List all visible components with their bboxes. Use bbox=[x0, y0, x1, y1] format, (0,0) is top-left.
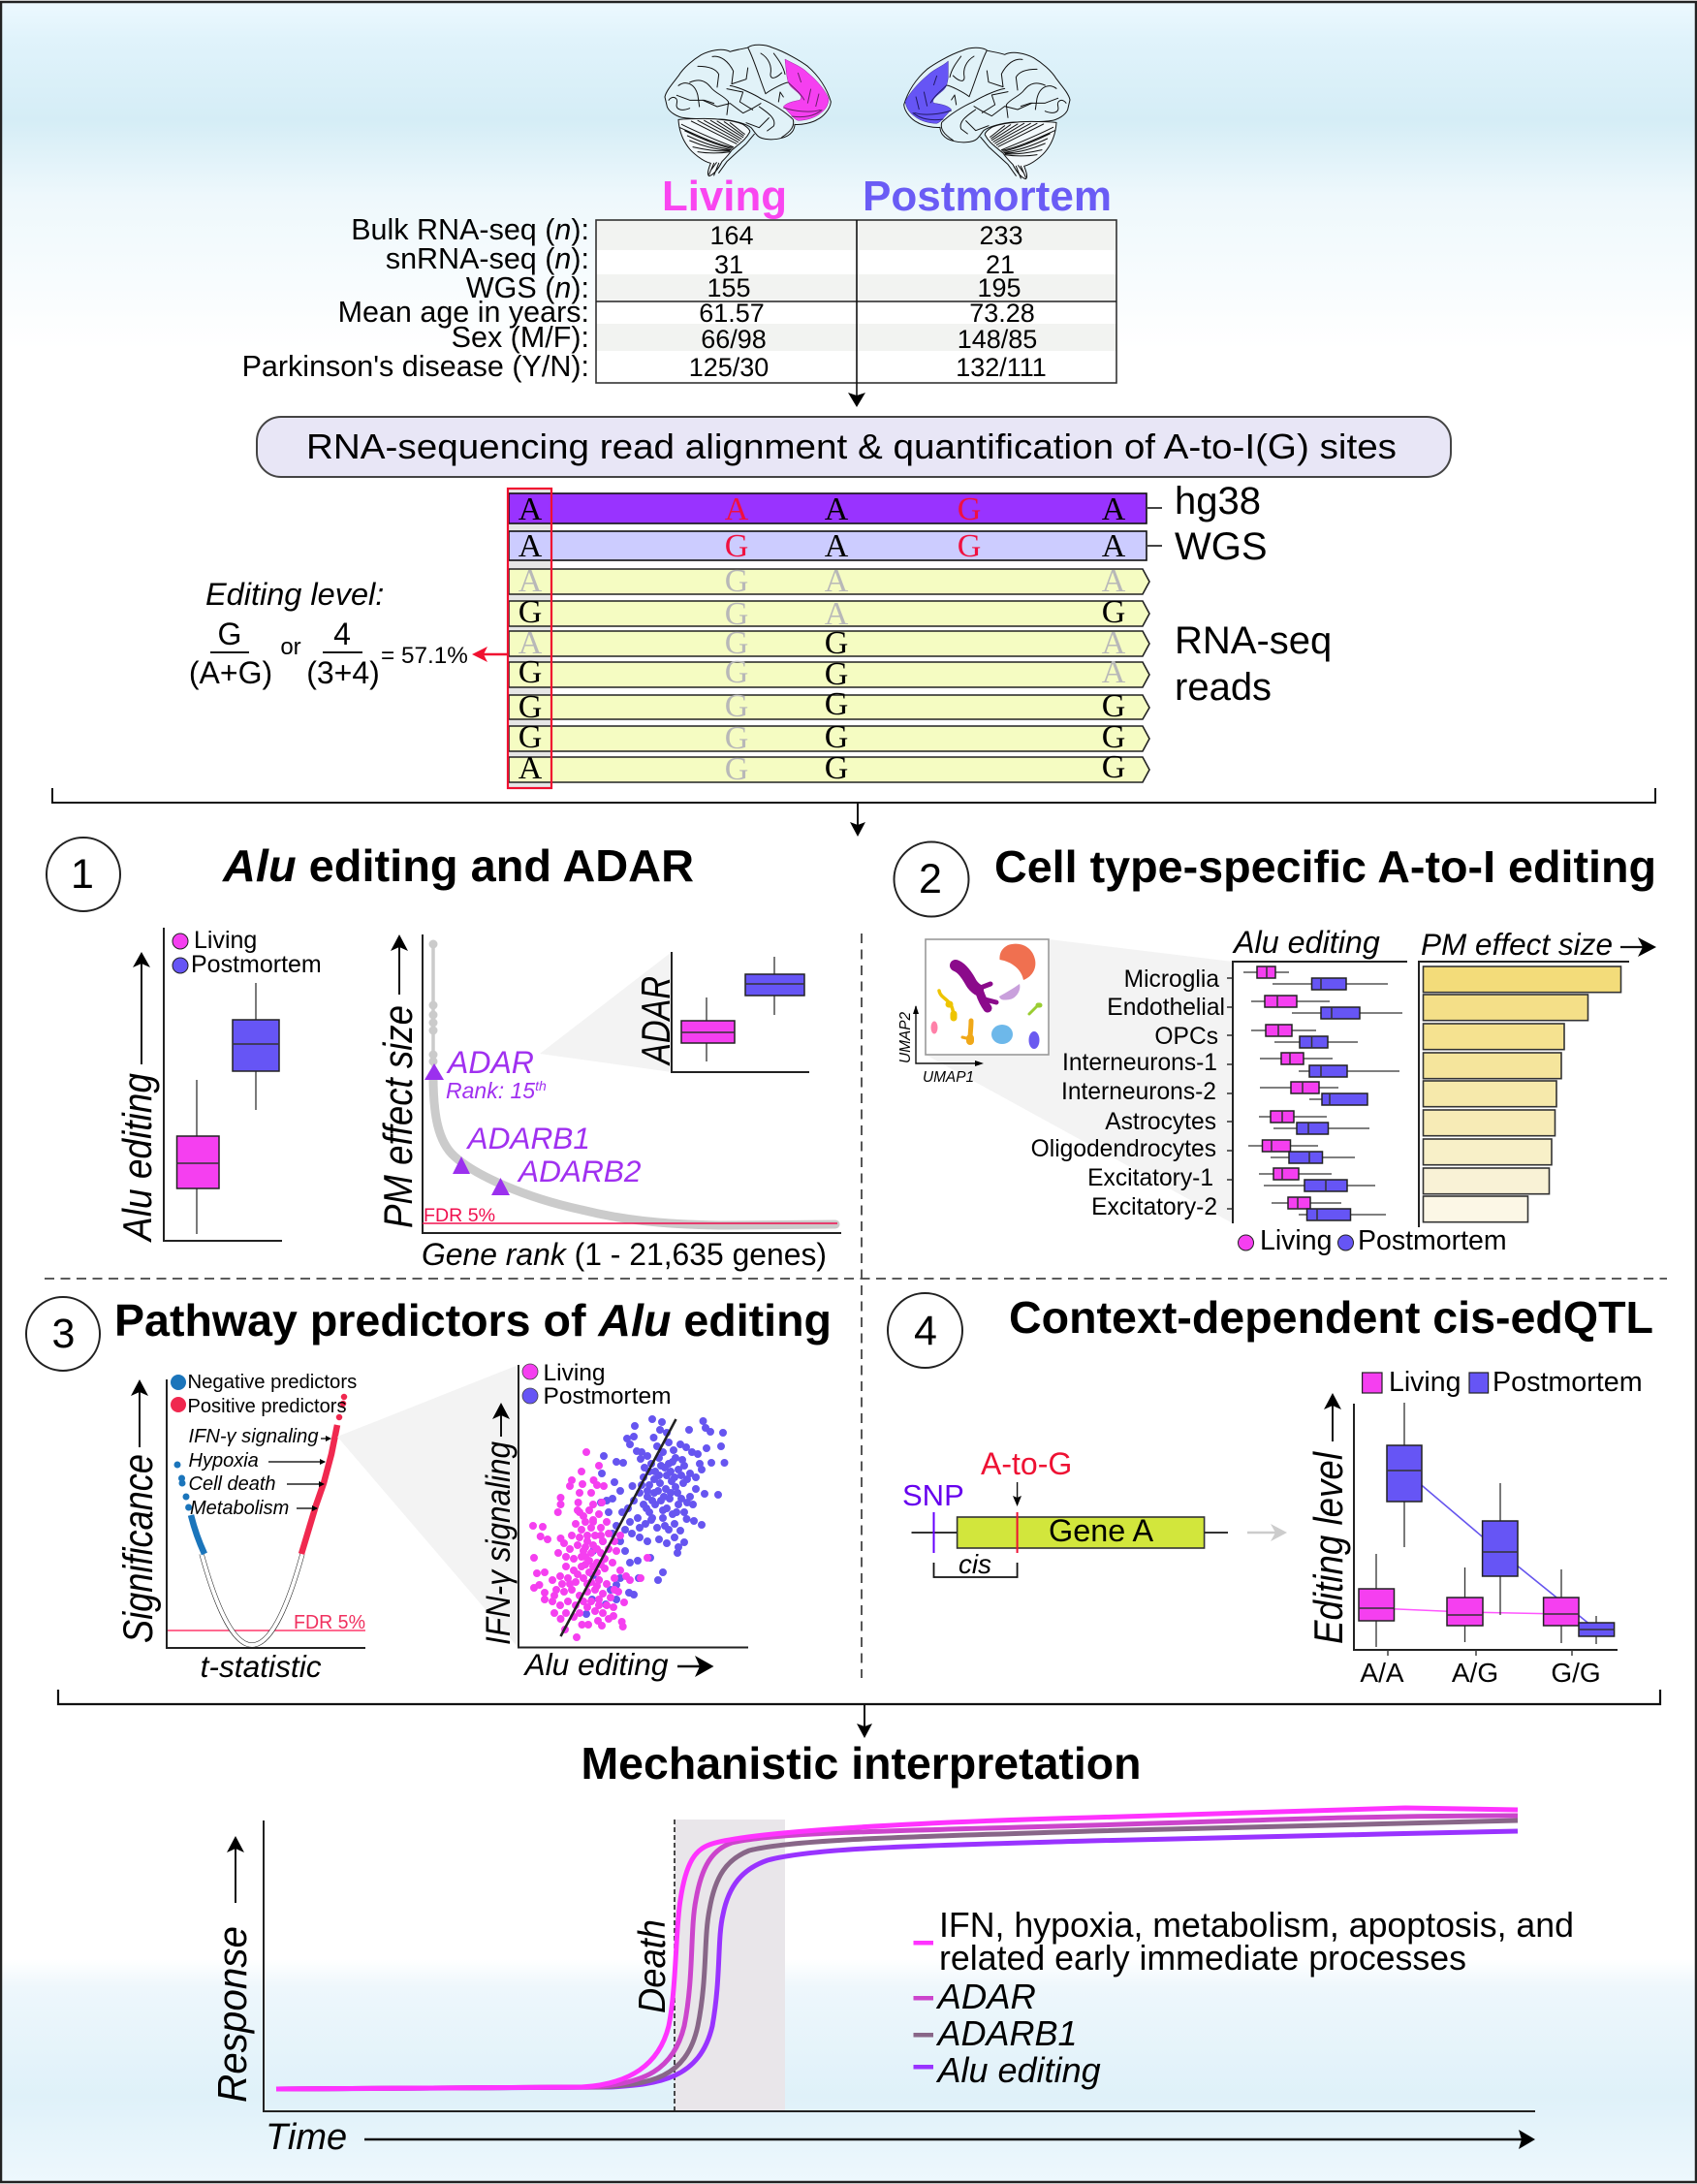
legend: Negative predictors bbox=[188, 1372, 357, 1393]
base letters bbox=[519, 491, 1126, 787]
table: cohort sample sizes: 61.57 bbox=[699, 299, 765, 328]
base letters: G bbox=[1102, 749, 1125, 785]
base letters: G bbox=[825, 750, 848, 786]
gene diagram: cis bbox=[958, 1549, 991, 1579]
base letters: A bbox=[825, 491, 849, 527]
FDR threshold: FDR 5% bbox=[424, 1205, 495, 1226]
base letters: G bbox=[725, 720, 748, 756]
base letters: G bbox=[725, 654, 748, 690]
gene diagram bbox=[902, 1446, 1228, 1579]
boxplot: editing by genotype: A/A bbox=[1360, 1658, 1404, 1688]
arrow bbox=[227, 1836, 244, 1903]
labels: tracks: RNA-seq bbox=[1175, 619, 1332, 662]
pathway annotations: Metabolism bbox=[190, 1498, 289, 1519]
table: cohort sample sizes: 125/30 bbox=[689, 353, 769, 382]
x axis label: t-statistic bbox=[201, 1649, 322, 1684]
bar chart: PM effect size bbox=[1419, 927, 1656, 1227]
icon: brain living bbox=[665, 45, 831, 176]
cell type labels: Microglia bbox=[1124, 966, 1219, 993]
arrow bbox=[492, 1403, 510, 1437]
gene labels: Rank: 15 bbox=[446, 1078, 535, 1103]
chart: PM effect size rank bbox=[375, 934, 841, 1272]
arrow: red to formula bbox=[472, 647, 507, 662]
x axis label: Time bbox=[266, 2117, 347, 2158]
base letters: G bbox=[519, 594, 542, 630]
base letters: A bbox=[725, 491, 749, 527]
table: cohort sample sizes: 195 bbox=[977, 273, 1021, 302]
boxplot: editing by genotype bbox=[1305, 1367, 1643, 1688]
base letters: G bbox=[725, 688, 748, 724]
legend bbox=[1363, 1367, 1643, 1398]
volcano plot bbox=[115, 1372, 365, 1684]
base letters: A bbox=[519, 491, 543, 527]
y axis label: Response bbox=[209, 1926, 255, 2103]
base letters: G bbox=[725, 751, 748, 787]
labels: tracks: hg38 bbox=[1175, 480, 1261, 522]
base letters: A bbox=[1102, 491, 1126, 527]
boxplot: editing by genotype: A/G bbox=[1452, 1658, 1498, 1688]
pathway annotations bbox=[188, 1426, 331, 1519]
base letters: G bbox=[825, 686, 848, 722]
legend: Postmortem bbox=[1358, 1225, 1507, 1256]
table: cohort sample sizes: WGS (n): bbox=[466, 271, 589, 304]
postmortem points bbox=[586, 1419, 725, 1614]
gene labels: th bbox=[535, 1078, 547, 1093]
table: cohort sample sizes: 73.28 bbox=[969, 299, 1035, 328]
UMAP bbox=[897, 939, 1049, 1086]
regression line bbox=[560, 1419, 676, 1636]
base letters: G bbox=[725, 528, 748, 564]
icon: brain postmortem bbox=[904, 47, 1070, 179]
negative points bbox=[191, 1515, 204, 1554]
legend: Living bbox=[543, 1360, 606, 1386]
table: cohort sample sizes: 155 bbox=[707, 273, 751, 302]
base letters: G bbox=[519, 719, 542, 755]
reference and read bars bbox=[509, 491, 1162, 787]
cell type labels: Interneurons-2 bbox=[1061, 1079, 1216, 1105]
legend: Postmortem bbox=[191, 951, 322, 978]
arrow bbox=[131, 1379, 148, 1447]
table: cohort sample sizes bbox=[242, 213, 1116, 396]
labels: tracks bbox=[1175, 480, 1332, 709]
formula: editing level: Editing level: bbox=[205, 577, 384, 612]
formula: editing level: or bbox=[280, 634, 301, 660]
base letters: G bbox=[725, 563, 748, 599]
boxplots: Alu editing per cell type: Alu editing bbox=[1232, 925, 1380, 960]
x axis label: Alu editing bbox=[523, 1647, 669, 1682]
base letters: G bbox=[519, 654, 542, 690]
y axis label: IFN-γ signaling bbox=[480, 1441, 518, 1645]
heading: Cell type-specific A-to-I editing bbox=[994, 841, 1656, 892]
pathway annotations: Hypoxia bbox=[188, 1450, 259, 1472]
volcano plot: FDR 5% bbox=[294, 1612, 365, 1633]
formula: editing level: (A+G) bbox=[189, 655, 272, 690]
arrow: gene to boxplot bbox=[1247, 1524, 1287, 1541]
arrow bbox=[133, 952, 150, 1064]
cell type labels bbox=[1031, 966, 1233, 1220]
gene labels: ADARB1 bbox=[465, 1121, 590, 1155]
cell type labels: Endothelial bbox=[1107, 995, 1225, 1021]
response curves chart bbox=[209, 1808, 1574, 2158]
cell type labels: Astrocytes bbox=[1105, 1109, 1216, 1135]
panel 2: cell type-specific editing bbox=[894, 841, 1656, 1256]
arrow bbox=[1324, 1393, 1341, 1441]
legend bbox=[1239, 1225, 1507, 1256]
rank curve bbox=[433, 944, 835, 1225]
panel 3: pathway predictors bbox=[26, 1295, 832, 1684]
cell type labels: OPCs bbox=[1154, 1024, 1218, 1050]
table: cohort sample sizes: snRNA-seq (n): bbox=[386, 242, 589, 275]
gene diagram: SNP bbox=[902, 1478, 964, 1512]
formula: editing level bbox=[189, 577, 468, 690]
table: cohort sample sizes: 148/85 bbox=[958, 325, 1037, 354]
UMAP axes: UMAP1 bbox=[923, 1069, 974, 1086]
base letters: A bbox=[1102, 654, 1126, 690]
inset boxplot: ADAR: ADAR bbox=[633, 976, 678, 1066]
living points bbox=[533, 1452, 647, 1637]
legend: Living bbox=[194, 927, 257, 954]
base letters: A bbox=[825, 563, 849, 599]
base letters: G bbox=[519, 689, 542, 725]
zoom wedge bbox=[926, 939, 1233, 1223]
formula: editing level: = 57.1% bbox=[381, 643, 468, 669]
arrow bbox=[677, 1656, 713, 1677]
panel 1: Alu editing and ADAR bbox=[47, 838, 841, 1272]
base letters: A bbox=[1102, 563, 1126, 599]
base letters: A bbox=[825, 528, 849, 564]
legend bbox=[173, 927, 322, 978]
heading pill bbox=[257, 417, 1451, 477]
table: cohort sample sizes: Bulk RNA-seq (n): bbox=[351, 213, 589, 246]
number badge 4 bbox=[888, 1293, 962, 1368]
boxplot: Alu editing bbox=[114, 927, 322, 1244]
gene diagram: A-to-G bbox=[981, 1446, 1072, 1481]
legend: Living bbox=[1260, 1225, 1332, 1256]
formula: editing level: 4 bbox=[333, 617, 351, 651]
dashed dividers bbox=[45, 934, 1667, 1678]
legend: related early immediate processes bbox=[939, 1938, 1466, 1978]
legend: Positive predictors bbox=[188, 1396, 347, 1417]
heading pill: RNA-sequencing read alignment & quantification of A-to-I(G) sites bbox=[306, 427, 1397, 466]
heading: Mechanistic interpretation bbox=[581, 1738, 1142, 1788]
gene markers bbox=[424, 1063, 510, 1195]
legend bbox=[913, 1905, 1574, 2090]
base letters: G bbox=[725, 625, 748, 661]
number badge 2 bbox=[894, 841, 969, 917]
table: cohort sample sizes: Mean age in years: bbox=[338, 296, 589, 329]
base letters: A bbox=[1102, 528, 1126, 564]
heading: Pathway predictors of Alu editing bbox=[114, 1295, 832, 1345]
number badge 4: 4 bbox=[914, 1308, 937, 1354]
base letters: A bbox=[825, 596, 849, 632]
base letters: G bbox=[825, 719, 848, 755]
legend: Postmortem bbox=[543, 1383, 672, 1409]
formula: editing level: G bbox=[218, 617, 241, 651]
base letters: G bbox=[1102, 594, 1125, 630]
curve: ADAR bbox=[276, 1816, 1518, 2089]
base letters: G bbox=[958, 491, 981, 527]
arrow bbox=[364, 2130, 1535, 2149]
base letters: G bbox=[958, 528, 981, 564]
curve: early immediate processes bbox=[276, 1808, 1518, 2089]
labels: tracks: WGS bbox=[1175, 525, 1268, 568]
UMAP axes bbox=[897, 1005, 984, 1086]
table: cohort sample sizes: Parkinson's disease (Y/N): bbox=[242, 350, 589, 383]
y axis label: Alu editing bbox=[114, 1073, 160, 1244]
legend bbox=[522, 1360, 672, 1409]
pathway annotations: IFN-γ signaling bbox=[188, 1426, 318, 1447]
arrow: table to alignment bbox=[848, 393, 865, 407]
base letters: G bbox=[825, 656, 848, 692]
bracket: analyses to interpretation bbox=[58, 1690, 1660, 1738]
y axis label: Editing level bbox=[1305, 1451, 1351, 1644]
table: cohort sample sizes: Sex (M/F): bbox=[452, 321, 589, 354]
table: cohort sample sizes: 21 bbox=[986, 250, 1015, 279]
cell type labels: Interneurons-1 bbox=[1062, 1050, 1217, 1076]
label: Death: Death bbox=[632, 1919, 674, 2013]
pathway annotations: Cell death bbox=[188, 1473, 276, 1495]
UMAP axes: UMAP2 bbox=[897, 1012, 914, 1063]
curve: Alu editing bbox=[276, 1831, 1518, 2089]
scatter plot bbox=[480, 1360, 748, 1682]
panel: read alignment bbox=[189, 417, 1451, 788]
number badge 3: 3 bbox=[52, 1311, 75, 1357]
number badge 2: 2 bbox=[919, 856, 942, 902]
x axis label: Gene rank (1 - 21,635 genes) bbox=[422, 1237, 827, 1272]
inset boxplot: ADAR bbox=[633, 952, 809, 1072]
legend: Alu editing bbox=[936, 2050, 1101, 2090]
boxplot: editing by genotype: G/G bbox=[1551, 1658, 1601, 1688]
base letters: A bbox=[519, 528, 543, 564]
y axis label: Significance bbox=[115, 1454, 162, 1643]
base letters: A bbox=[519, 625, 543, 661]
base letters: A bbox=[519, 563, 543, 599]
inset wedge bbox=[540, 952, 672, 1072]
highlight: edited column background bbox=[508, 489, 551, 788]
curve: ADARB1 bbox=[276, 1820, 1518, 2089]
table: cohort sample sizes: 132/111 bbox=[956, 353, 1047, 382]
legend: ADARB1 bbox=[936, 2013, 1078, 2053]
legend: IFN, hypoxia, metabolism, apoptosis, and bbox=[939, 1905, 1574, 1945]
number badge 1 bbox=[47, 838, 120, 911]
number badge 3 bbox=[26, 1297, 100, 1371]
panel: cohort overview bbox=[242, 45, 1116, 407]
cell type labels: Oligodendrocytes bbox=[1031, 1136, 1216, 1162]
legend: ADAR bbox=[936, 1977, 1036, 2016]
bracket: alignment to analyses bbox=[52, 788, 1655, 837]
table: cohort sample sizes: 164 bbox=[709, 221, 754, 250]
panel: mechanistic interpretation bbox=[209, 1738, 1574, 2158]
base letters: G bbox=[825, 625, 848, 661]
legend: Living bbox=[1389, 1367, 1461, 1398]
gene diagram: Gene A bbox=[1049, 1513, 1153, 1548]
highlight: edited column frame bbox=[508, 489, 551, 788]
heading: Context-dependent cis-edQTL bbox=[1009, 1292, 1653, 1343]
table: cohort sample sizes: 31 bbox=[714, 250, 743, 279]
legend: Postmortem bbox=[1493, 1367, 1643, 1398]
base letters: G bbox=[725, 596, 748, 632]
heading: Alu editing and ADAR bbox=[222, 840, 694, 891]
gene labels: ADARB2 bbox=[517, 1154, 642, 1188]
heading: Postmortem: Postmortem bbox=[863, 173, 1112, 220]
panel 4: context-dependent cis-edQTL bbox=[888, 1292, 1653, 1688]
table: cohort sample sizes: 233 bbox=[979, 221, 1023, 250]
base letters: A bbox=[519, 750, 543, 786]
cell type labels: Excitatory-2 bbox=[1091, 1194, 1217, 1220]
arrow bbox=[391, 934, 408, 995]
legend bbox=[171, 1372, 357, 1417]
formula: editing level: (3+4) bbox=[306, 655, 380, 690]
bar chart: PM effect size: PM effect size bbox=[1421, 927, 1613, 962]
zoom wedge bbox=[337, 1365, 519, 1648]
table: cohort sample sizes: 66/98 bbox=[701, 325, 767, 354]
base letters: G bbox=[1102, 688, 1125, 724]
cell type labels: Excitatory-1 bbox=[1087, 1165, 1213, 1191]
labels: tracks: reads bbox=[1175, 666, 1272, 709]
y axis label: PM effect size bbox=[375, 1005, 421, 1228]
gene labels: ADAR bbox=[446, 1045, 534, 1080]
base letters: G bbox=[1102, 719, 1125, 755]
gene labels bbox=[446, 1045, 642, 1188]
number badge 1: 1 bbox=[71, 851, 94, 898]
heading: Living: Living bbox=[662, 173, 787, 220]
boxplots: Alu editing per cell type bbox=[1232, 925, 1407, 1223]
positive points bbox=[301, 1425, 337, 1554]
base letters: A bbox=[1102, 625, 1126, 661]
